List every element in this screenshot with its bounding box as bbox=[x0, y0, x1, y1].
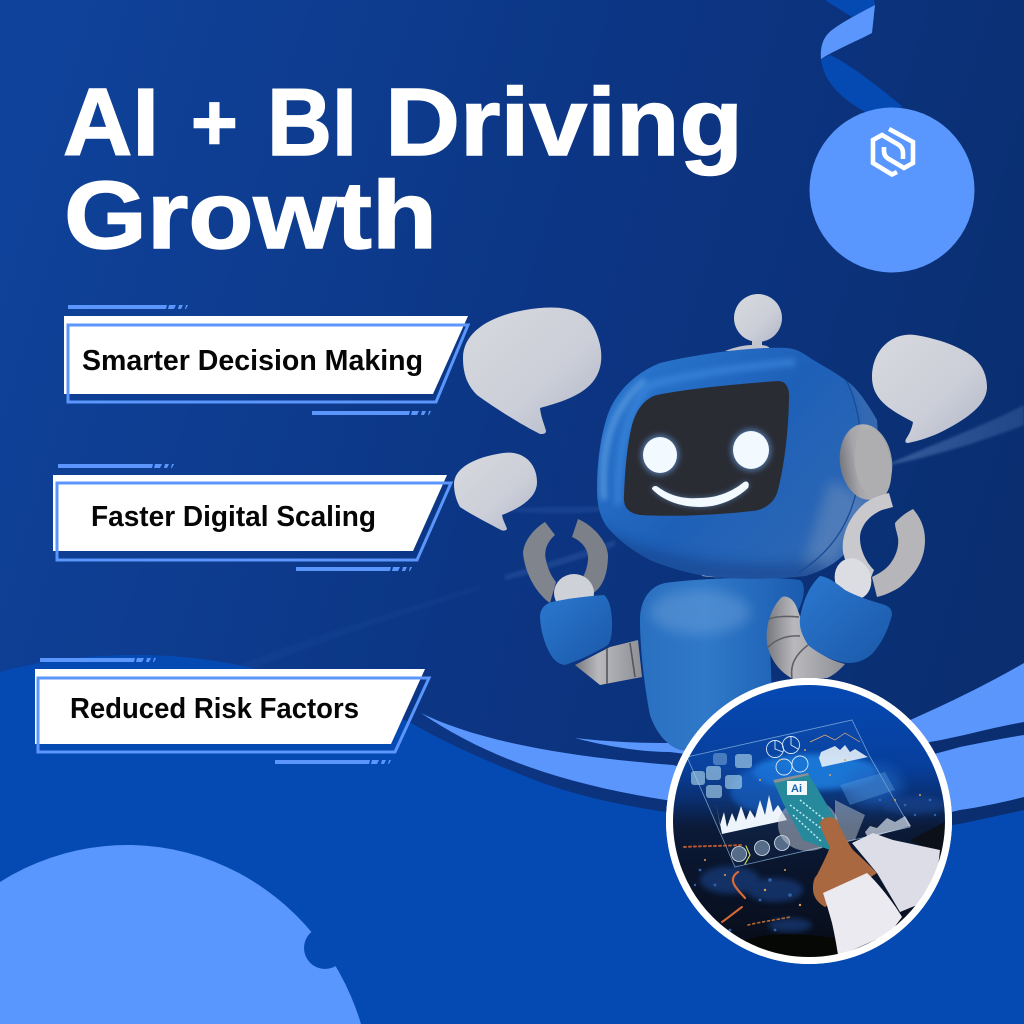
robot: right finger ball bbox=[829, 553, 877, 605]
robot: left arm bbox=[575, 640, 642, 685]
title: Driving bbox=[385, 69, 743, 176]
photo: pointing hand bbox=[813, 817, 877, 907]
robot: head bbox=[597, 348, 878, 579]
card 2: Faster Digital Scaling bbox=[53, 464, 451, 571]
photo: right hologram glow bbox=[835, 800, 865, 845]
card 1: Smarter Decision Making: Smarter Decision Making bbox=[82, 345, 423, 377]
card 2: Faster Digital Scaling: Faster Digital Scaling bbox=[91, 501, 376, 533]
card 3: Reduced Risk Factors bbox=[35, 658, 429, 764]
photo: upper sleeve bbox=[852, 833, 940, 912]
photo: sky and night city base bbox=[672, 684, 946, 958]
wave: bright blue foreground bbox=[0, 655, 1024, 1024]
robot: left hand bbox=[540, 595, 612, 665]
photo: lower right white chart bbox=[865, 816, 911, 838]
speech bubble: right bbox=[872, 335, 987, 443]
robot: smile bbox=[652, 481, 749, 507]
photo: hologram tiles bbox=[691, 753, 752, 798]
ribbon bbox=[821, 0, 903, 112]
robot: right hand bbox=[800, 576, 892, 663]
robot: face screen bbox=[624, 381, 789, 516]
title: BI bbox=[267, 69, 357, 176]
photo: smartphone: Ai bbox=[791, 783, 802, 795]
photo: smartphone bbox=[773, 773, 842, 850]
title: AI bbox=[63, 69, 159, 176]
photo: translucent hand bbox=[778, 805, 838, 851]
photo: dark trees bbox=[744, 934, 838, 957]
robot: body highlight bbox=[650, 590, 750, 634]
photo: hologram panel outline bbox=[687, 720, 910, 867]
speech bubble: large left bbox=[463, 307, 601, 434]
title bbox=[63, 69, 743, 269]
photo: small round gauges bbox=[732, 836, 790, 862]
photo: dark hillside bbox=[910, 822, 945, 856]
photo: city blue glow patches bbox=[700, 796, 947, 932]
robot: right claw bbox=[843, 493, 925, 597]
title: Growth bbox=[64, 162, 437, 269]
photo: blue holographic glow bbox=[730, 754, 903, 814]
photo: AI hologram over night city bbox=[666, 678, 952, 964]
photo: right dot grid chart bbox=[840, 772, 895, 805]
photo: city road lights bbox=[684, 845, 790, 925]
circle notch bbox=[304, 927, 346, 969]
card 3: Reduced Risk Factors: Reduced Risk Factors bbox=[70, 693, 359, 725]
photo: shirt cuff bbox=[823, 873, 902, 955]
robot: body bbox=[640, 578, 804, 752]
photo: hologram pie charts bbox=[766, 736, 808, 775]
robot: right eye bbox=[731, 429, 771, 471]
background light streaks bbox=[230, 405, 1024, 675]
robot: left finger ball bbox=[554, 574, 594, 612]
decorative circle bottom left bbox=[0, 845, 361, 1024]
icon: hexagon link logo bbox=[873, 129, 913, 174]
robot: right arm bbox=[767, 597, 845, 679]
wave: light blue lower band bbox=[421, 713, 1024, 820]
robot: ear bbox=[835, 421, 897, 503]
robot: antenna bbox=[725, 294, 782, 351]
logo circle bbox=[810, 108, 974, 272]
robot bbox=[523, 294, 925, 752]
title: + bbox=[191, 78, 238, 167]
wave: light blue upper band bbox=[575, 663, 1024, 770]
robot: left claw bbox=[523, 519, 608, 603]
photo: upper area chart bbox=[810, 733, 868, 767]
speech bubble: small left bbox=[454, 453, 537, 531]
photo: city scattered lights bbox=[694, 799, 936, 931]
photo: white spike chart bbox=[716, 795, 787, 834]
robot: left eye bbox=[641, 435, 679, 475]
robot: neck bbox=[702, 566, 755, 577]
card 1: Smarter Decision Making bbox=[64, 305, 468, 415]
